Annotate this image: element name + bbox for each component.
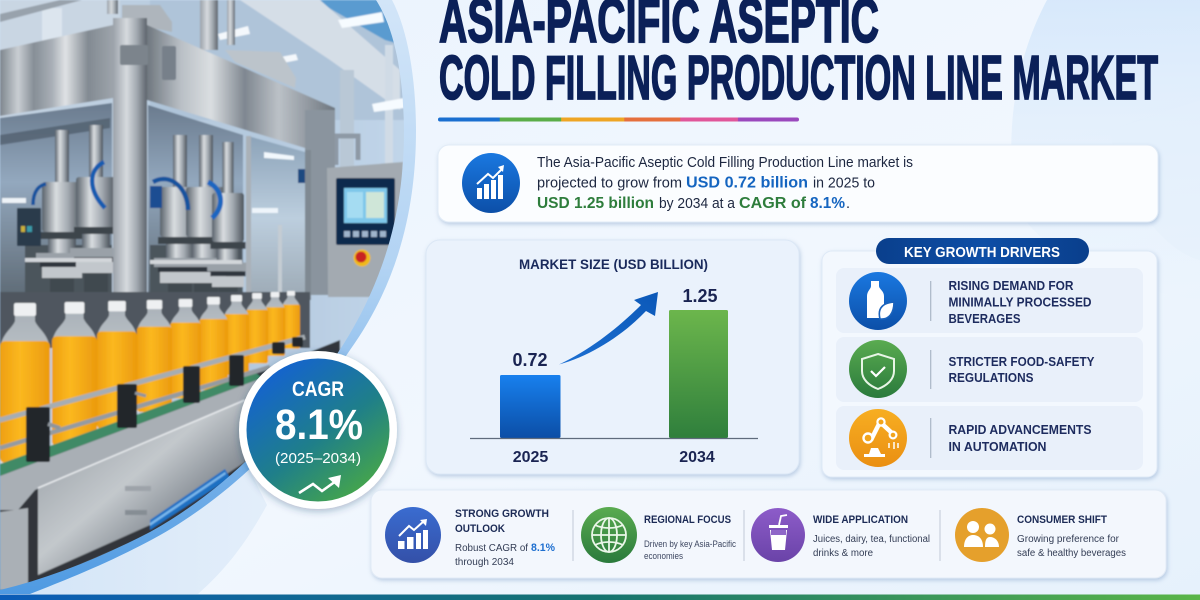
text: market summary: The Asia-Pacific Aseptic Cold Filling Production Line market is: [537, 155, 913, 171]
icon: bottle and leaf: [849, 272, 907, 330]
text: market summary: 8.1%: [810, 195, 845, 212]
bar: 2034: 2034: [679, 449, 715, 466]
chart heading: MARKET SIZE (USD BILLION): [519, 256, 708, 272]
highlight: wide application: [751, 508, 930, 562]
highlight: wide application: drinks & more: [813, 548, 873, 559]
panel: market summary: [438, 145, 1158, 222]
panel: market size chart: [426, 240, 799, 474]
icon: drink cup: [751, 508, 805, 562]
driver row: minimally processed beverages: RISING DEMAND FOR: [948, 279, 1074, 293]
bar: 2034: 1.25: [682, 286, 718, 306]
highlight: strong growth outlook: [385, 507, 555, 568]
text: market summary: by 2034 at a: [659, 196, 736, 212]
icon: trend arrow: [299, 475, 341, 493]
highlight: regional focus: economies: [644, 551, 683, 561]
icon: people: [955, 508, 1009, 562]
CAGR badge: [239, 351, 397, 509]
text: market summary: USD 1.25 billion: [537, 195, 654, 212]
photo: guide rails and brackets: [0, 337, 305, 462]
highlight: regional focus: REGIONAL FOCUS: [644, 514, 731, 526]
highlight: strong growth outlook: 8.1%: [531, 542, 555, 554]
bar: 2034: [669, 286, 728, 466]
photo: steel column: [113, 18, 311, 310]
photo: glass windows with filling heads: [0, 103, 335, 316]
bar: 2025: [500, 350, 560, 466]
bar: 2025: 0.72: [512, 350, 548, 370]
heading pill: KEY GROWTH DRIVERS: [904, 245, 1060, 261]
driver row: food-safety regulations: REGULATIONS: [948, 371, 1034, 385]
text: market summary: CAGR of: [739, 195, 807, 212]
driver row: food-safety regulations: [836, 337, 1143, 402]
panel: key growth drivers: [822, 238, 1157, 477]
highlight: strong growth outlook: Robust CAGR of: [455, 542, 528, 554]
photo: control panel: [327, 162, 403, 297]
driver row: automation: [836, 406, 1143, 470]
icon: globe: [581, 507, 637, 563]
icon: growth chart: [462, 153, 520, 213]
photo: machinery behind bottles: [0, 292, 310, 348]
CAGR badge: CAGR: [292, 377, 344, 401]
driver row: minimally processed beverages: MINIMALLY PROCESSED: [948, 296, 1092, 310]
CAGR badge: 8.1%: [275, 401, 363, 449]
heading pill: [876, 238, 1089, 264]
highlight: strong growth outlook: through 2034: [455, 556, 514, 568]
highlight: strong growth outlook: STRONG GROWTH: [455, 508, 549, 520]
text: market summary: [537, 155, 913, 212]
highlight: wide application: WIDE APPLICATION: [813, 514, 908, 526]
highlight: regional focus: Driven by key Asia-Pacific: [644, 539, 736, 549]
driver row: minimally processed beverages: BEVERAGES: [948, 312, 1020, 326]
curved blue band and soft lower shape: [0, 0, 416, 594]
photo: pipes above hood: [107, 0, 235, 50]
highlight: consumer shift: safe & healthy beverages: [1017, 548, 1126, 559]
highlight: strong growth outlook: OUTLOOK: [455, 523, 505, 535]
footer gradient bar: [0, 594, 1200, 600]
photo: row of juice bottles: [0, 291, 300, 463]
CAGR badge: (2025–2034): [275, 450, 361, 467]
arrow: growth: [559, 292, 658, 364]
icon: shield check: [849, 340, 907, 398]
driver row: minimally processed beverages: [836, 268, 1143, 333]
title rule: multicolour underline: [438, 118, 799, 122]
highlight: regional focus: [581, 507, 736, 563]
icon: bar chart: [385, 507, 441, 563]
text: market summary: in 2025 to: [813, 176, 875, 192]
photo: conveyor steel base: [0, 340, 340, 600]
bar: 2025: 2025: [513, 449, 548, 466]
panel: bottom highlights: [371, 490, 1166, 578]
highlight: consumer shift: Growing preference for: [1017, 534, 1120, 545]
highlight: wide application: Juices, dairy, tea, functional: [813, 534, 930, 545]
text: market summary: USD 0.72 billion: [686, 174, 808, 192]
title: [439, 0, 1158, 100]
text: market summary: .: [846, 196, 850, 212]
photo: factory ceiling and background: [0, 0, 420, 170]
driver row: food-safety regulations: STRICTER FOOD-SAFETY: [948, 355, 1095, 369]
driver row: automation: RAPID ADVANCEMENTS: [948, 423, 1092, 437]
text: market summary: projected to grow from: [537, 176, 682, 192]
photo: machine hoods: [0, 25, 335, 150]
highlight: consumer shift: CONSUMER SHIFT: [1017, 514, 1107, 526]
highlight: consumer shift: [955, 508, 1126, 562]
driver row: automation: IN AUTOMATION: [948, 440, 1046, 454]
photo: aseptic filling line with juice bottles: [0, 0, 420, 600]
icon: robot arm: [849, 409, 907, 467]
